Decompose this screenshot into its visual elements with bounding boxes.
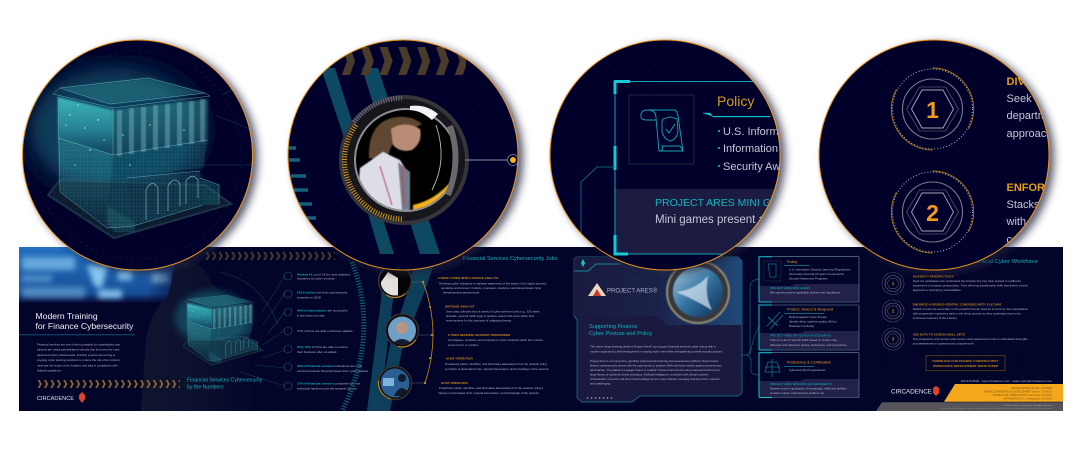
panel: card proficiency bbox=[759, 353, 859, 398]
card title: Policy bbox=[717, 93, 754, 109]
job descriptions: threat/warning assessments. bbox=[443, 290, 480, 294]
footer logo: CIRCADENCE bbox=[891, 388, 932, 396]
Project Ares copy: Project Ares is an immersive, gamified cybersecurity learning and assessment platform that provides bbox=[590, 359, 719, 363]
portrait 2 bbox=[386, 314, 418, 347]
stat list: Only 45% of firms are able to restore bbox=[297, 345, 348, 349]
workforce heading: Develop a Diverse and Resilient Critical Cyber Workforce bbox=[891, 259, 1038, 265]
job descriptions: HUNT OPERATOR bbox=[446, 356, 473, 360]
dial 2: 2 bbox=[926, 200, 939, 226]
strategy 1 text: department bbox=[1006, 110, 1062, 122]
panel: card proficiency: Assess a user's application of knowledge, skills and abilities bbox=[770, 386, 847, 390]
connector bbox=[581, 167, 615, 270]
building mini illustration bbox=[175, 291, 263, 365]
panel: card policy bbox=[759, 257, 859, 302]
panel: cybersecurity jobs bbox=[342, 247, 558, 411]
orange address block: HEADQUARTERS Boulder, CO 80302 bbox=[1011, 387, 1053, 390]
job descriptions: HUNT OPERATOR bbox=[441, 381, 468, 385]
circle: analyst portrait bbox=[288, 40, 518, 270]
stat list: concerned about financial losses from cyber attacks bbox=[297, 369, 368, 373]
job descriptions bbox=[438, 276, 549, 395]
panel: card protect: Defend against Cyber threats bbox=[789, 315, 827, 319]
panel: card proficiency: Proficiency & Certification bbox=[787, 360, 831, 364]
hud rings bbox=[34, 51, 242, 259]
panel: Project Ares bbox=[573, 257, 742, 402]
stat list: in less than one day bbox=[297, 314, 325, 318]
dial 1: 1 bbox=[926, 97, 939, 123]
job descriptions: a mixture of automated tools, manual intervention, and knowledge of the network. bbox=[445, 367, 549, 371]
orange address block: CENTER FOR CYBER ACTIVITY San Diego, CA 92121 bbox=[993, 394, 1053, 397]
Project Ares heading: Supporting Finance bbox=[589, 324, 638, 330]
strategy 2: continuous learners of the industry. bbox=[913, 316, 958, 320]
strategy 2: ENFORCE A PEOPLE-CENTRIC CYBERSECURITY CULTURE bbox=[913, 302, 1002, 306]
numbers heading: by the Numbers bbox=[187, 384, 224, 390]
panel: card policy: Information Security Program Components bbox=[789, 272, 844, 276]
Project Ares copy: and challenging. bbox=[590, 382, 611, 386]
panel: card policy: Policy bbox=[787, 259, 797, 264]
panel: card protect bbox=[759, 305, 859, 350]
download button bbox=[926, 356, 1005, 371]
circle: policy card detail: Mini games present applicable policies bbox=[655, 214, 852, 226]
contact line: 303.615.8600 · www.circadence.com · sales-cyber@circadence.com bbox=[961, 379, 1052, 383]
hero paragraph: Financial services are one of the top targets for cyberattacks and bbox=[37, 342, 120, 346]
panel: card proficiency: Cybersecurity Preparedness bbox=[789, 368, 826, 372]
panel: card protect: Protect, Detect & Respond bbox=[787, 306, 833, 312]
panel: card proficiency: PROJECT ARES MISSIONS & ASSESSMENTS bbox=[770, 382, 832, 386]
panel: card protect: Business Continuity bbox=[789, 324, 815, 328]
strategy 1: department to broaden perspectives. They will bring transferrable skills that deliver a fresh bbox=[913, 284, 1028, 288]
chevrons top bbox=[205, 252, 335, 260]
panel: card policy: PROJECT ARES MINI GAMES bbox=[770, 286, 810, 290]
dial 1 bbox=[891, 68, 974, 150]
strategy 3: Test prospective and current cyber teams using assessment tools to understand strengths bbox=[913, 337, 1028, 341]
orange address block: ADVANCED RESEARCH & DEVELOPMENT Denver, CO 80237 bbox=[984, 390, 1053, 394]
strategy 1 text: approach bbox=[1006, 128, 1052, 140]
numbers heading: Financial Services Cybersecurity bbox=[187, 378, 263, 384]
dashed arc bbox=[342, 262, 364, 411]
stat list: 89% of cyberattacks are successful bbox=[297, 308, 348, 312]
orange address block: WASHINGTON D.C. Headquarters, VA 22102 bbox=[1004, 398, 1053, 400]
chevrons bbox=[341, 47, 466, 75]
stat list: their business after an attack bbox=[297, 350, 337, 354]
arc nodes bbox=[422, 281, 433, 384]
job descriptions: CYBER DEFENSE INCIDENT RESPONDER bbox=[448, 333, 511, 337]
strategy 3 bbox=[882, 328, 1028, 350]
footer logo bbox=[891, 386, 939, 396]
Project Ares copy: orchestration converts real-time threat intelligence into new missions, keeping learning fresh, relevant bbox=[590, 377, 720, 381]
teal bands bbox=[367, 268, 393, 411]
hero title: Modern Training bbox=[36, 311, 98, 321]
panel: card protect: PROJECT ARES BATTLE ROOM SCENARIOS bbox=[770, 334, 831, 338]
chevron divider bbox=[37, 380, 180, 388]
job descriptions: environment or enclave. bbox=[448, 343, 479, 347]
grey legal strip: Circadence, the Circadence logo, Project Ares and the Project Ares logo are trademarks of Circadence Corporation. bbox=[940, 407, 1052, 410]
panel: card protect: Train on a set of specific skills based on modern day bbox=[770, 338, 838, 342]
building bbox=[30, 68, 231, 238]
radial lines bbox=[220, 272, 285, 386]
hero paragraph: minimize the impact of an incident, and stay in compliance with bbox=[37, 363, 118, 367]
strategy 2 text: ENFORCE bbox=[1006, 182, 1060, 194]
job descriptions: Investigates, analyzes, and responds to cyber incidents within the network bbox=[448, 338, 543, 342]
silhouette of analyst bbox=[141, 262, 242, 411]
photo rim bbox=[410, 106, 438, 120]
Project Ares copy: large library of authentic threat scenarios. Artificial intelligence combined with virtual machine bbox=[590, 372, 709, 376]
strategy 3: 3 bbox=[892, 337, 895, 342]
job descriptions: Develops cyber indicators to maintain awareness of the status of the highly dynamic bbox=[439, 282, 547, 286]
world map backdrop bbox=[19, 247, 189, 305]
portrait 1 bbox=[378, 264, 412, 298]
Project Ares copy bbox=[590, 344, 723, 386]
jobs heading: Financial Services Cybersecurity Jobs bbox=[463, 256, 558, 262]
circle: numbered strategies bbox=[819, 40, 1065, 270]
chart: mini building and numbers bbox=[175, 252, 368, 390]
Project Ares copy: adversaries. The platform engages teams in realistic virtual environments using real-world tools and a bbox=[590, 368, 720, 372]
strategy 2: with prospective employees early in the hiring process so they understand how to be bbox=[913, 312, 1021, 316]
hero paragraph: advanced cyber professionals. Industry experts are turning to bbox=[37, 353, 116, 357]
job descriptions: DEFENSE ANALYST bbox=[445, 304, 475, 308]
Project Ares logo bbox=[588, 283, 658, 296]
card frame bbox=[614, 81, 785, 254]
stat list: individual hackers pose the greatest danger bbox=[297, 386, 357, 390]
orange address block bbox=[944, 384, 1063, 402]
stat icons bbox=[284, 272, 292, 390]
strategy 1: DIVERSITY PERSPECTIVES bbox=[913, 274, 954, 278]
bullet list: U.S. Information Security Laws bbox=[723, 126, 875, 138]
strategy 1: approach to minimizing vulnerabilities. bbox=[913, 288, 962, 292]
stat list: 27% of financial services companies believe bbox=[297, 382, 360, 386]
strategy 1 text: DIVERSITY bbox=[1006, 76, 1065, 88]
job descriptions: Uses data collected from a variety of cyber defense tools (e.g., IDS alerts, bbox=[446, 310, 541, 314]
strategy 2 text: continuous bbox=[1006, 234, 1060, 246]
strategy 1 bbox=[882, 272, 1028, 294]
hero paragraph: ongoing cyber learning solutions to reduce the risk of an incident, bbox=[37, 358, 120, 362]
icon: policy scroll with shield bbox=[629, 95, 694, 164]
strategy 1: 1 bbox=[892, 281, 895, 286]
strategy 1 text bbox=[1006, 76, 1065, 140]
stat list: industries by cyber criminal bbox=[297, 276, 335, 280]
hero title bbox=[36, 313, 134, 330]
hero paragraph: federal regulations. bbox=[37, 368, 62, 372]
strategy 1 text: Seek out bbox=[1006, 93, 1050, 105]
panel: card policy: Mini games present applicable policies and regulations bbox=[770, 290, 841, 294]
portrait 3 bbox=[378, 366, 412, 400]
job descriptions: mixture of automated tools, manual intervention, and knowledge of the network. bbox=[438, 391, 540, 395]
strategy 1: Seek out candidates who understand the industry but may have worked in a different bbox=[913, 279, 1021, 283]
grey legal strip: ©2020 Circadence Corporation. All rights reserved. bbox=[1003, 404, 1052, 407]
Project Ares heading: Cyber Posture and Policy bbox=[589, 331, 652, 337]
job descriptions: Proactively tracks, identifies, and eliminates adversaries from the network using a bbox=[439, 386, 544, 390]
job descriptions: CYBER CYBER INTELLIGENCE ANALYST bbox=[438, 276, 499, 280]
circle: policy card detail bbox=[550, 40, 875, 270]
job descriptions: operating environment. Collects, processes, analyzes, and disseminates cyber bbox=[441, 286, 541, 290]
portrait photo bbox=[350, 105, 465, 215]
Circadence logo: CIRCADENCE bbox=[37, 396, 74, 402]
bullet list: Information Security Program bbox=[723, 143, 866, 155]
download button: WORKFORCE DEVELOPMENT WHITE PAPER bbox=[933, 364, 999, 368]
strategy 3: and weaknesses in cybersecurity competencies. bbox=[913, 342, 975, 346]
stat list: 56% of financial services institutions are most bbox=[297, 364, 362, 368]
panel: card policy: U.S. Information Security Laws and Regulations bbox=[789, 268, 851, 272]
hero title: for Finance Cybersecurity bbox=[36, 321, 134, 331]
panel: card policy: Security Awareness Programs bbox=[789, 276, 828, 280]
hero paragraph: hackers are using sophisticated methods that fool even the most bbox=[37, 348, 120, 352]
connectors bbox=[742, 279, 759, 375]
panel: card protect: Identify direct machine quality (NVcc) bbox=[789, 320, 837, 324]
Project Ares copy: The cyber range learning platform Project Ares® can support financial services cyber teams with a bbox=[590, 344, 716, 348]
stat list bbox=[297, 272, 368, 390]
pagination dots bbox=[587, 397, 612, 399]
job descriptions: firewalls, network traffic logs) to analyze events that occur within their bbox=[446, 314, 535, 318]
panel body bbox=[574, 257, 742, 402]
dial 2 bbox=[891, 171, 974, 253]
panel: workforce bbox=[876, 259, 1063, 411]
Project Ares logo: PROJECT ARES® bbox=[607, 288, 658, 294]
icon bbox=[764, 261, 781, 281]
job descriptions: environments for the purposes of mitigating threats. bbox=[446, 318, 512, 322]
Circadence logo bbox=[37, 392, 85, 403]
strategy 2: Stacks of tools are secondary to the powerful human element of security. Set expectations bbox=[913, 307, 1028, 311]
numbers heading bbox=[187, 378, 263, 390]
panel: card proficiency: to solve a given cybersecurity problem set bbox=[770, 391, 824, 395]
circle: 3D building bbox=[22, 40, 252, 270]
bullet list bbox=[718, 126, 875, 173]
stat list: $16.6 million lost from cybersecurity bbox=[297, 290, 348, 294]
strategy 2 text: with pro bbox=[1006, 216, 1045, 228]
stat list: 37% of firms are able to discover attacks bbox=[297, 329, 353, 333]
strategy 2 text: Stacks of bbox=[1006, 199, 1053, 211]
icon bbox=[767, 312, 783, 329]
panel: intro hero bbox=[19, 247, 255, 411]
Project Ares copy: finance cybersecurity teams with the opportunity to practice skills and hone tactics against autonomous bbox=[590, 364, 722, 368]
teal bands bbox=[321, 68, 394, 254]
icon bbox=[765, 359, 780, 377]
strategy 2 text bbox=[1006, 182, 1060, 246]
side ticks bbox=[288, 148, 316, 218]
grey legal strip bbox=[876, 402, 1063, 411]
download button: DOWNLOAD OUR FINANCE CYBERSECURITY bbox=[932, 359, 999, 363]
Project Ares copy: modern approach to skill development in varying work roles while strengthening overall security posture. bbox=[590, 350, 723, 354]
mini games text: PROJECT ARES MINI GAMES bbox=[655, 197, 801, 209]
panel: card protect: offensive and defensive tactics, techniques, and procedures bbox=[770, 343, 847, 347]
strategy 2 bbox=[882, 300, 1028, 322]
stat list: Ranked #1 out of 16 for most attacked bbox=[297, 272, 350, 276]
panel image with orb bbox=[573, 257, 742, 325]
portrait ring bbox=[341, 97, 467, 223]
connecting arc bbox=[423, 282, 433, 383]
strategy 2: 2 bbox=[892, 309, 895, 314]
banner: full infographic strip bbox=[19, 247, 1063, 411]
stat list: breaches in 2019 bbox=[297, 296, 321, 300]
strategy 3: USE DATA TO ASSESS SKILL SETS bbox=[913, 332, 965, 336]
bullet list: Security Awareness Programs bbox=[723, 161, 871, 173]
Project Ares heading bbox=[589, 324, 652, 337]
connector and node bbox=[465, 154, 518, 166]
job descriptions: Proactively tracks, identifies, and eliminates adversaries from the network using bbox=[445, 362, 547, 366]
hero paragraph bbox=[37, 342, 120, 372]
